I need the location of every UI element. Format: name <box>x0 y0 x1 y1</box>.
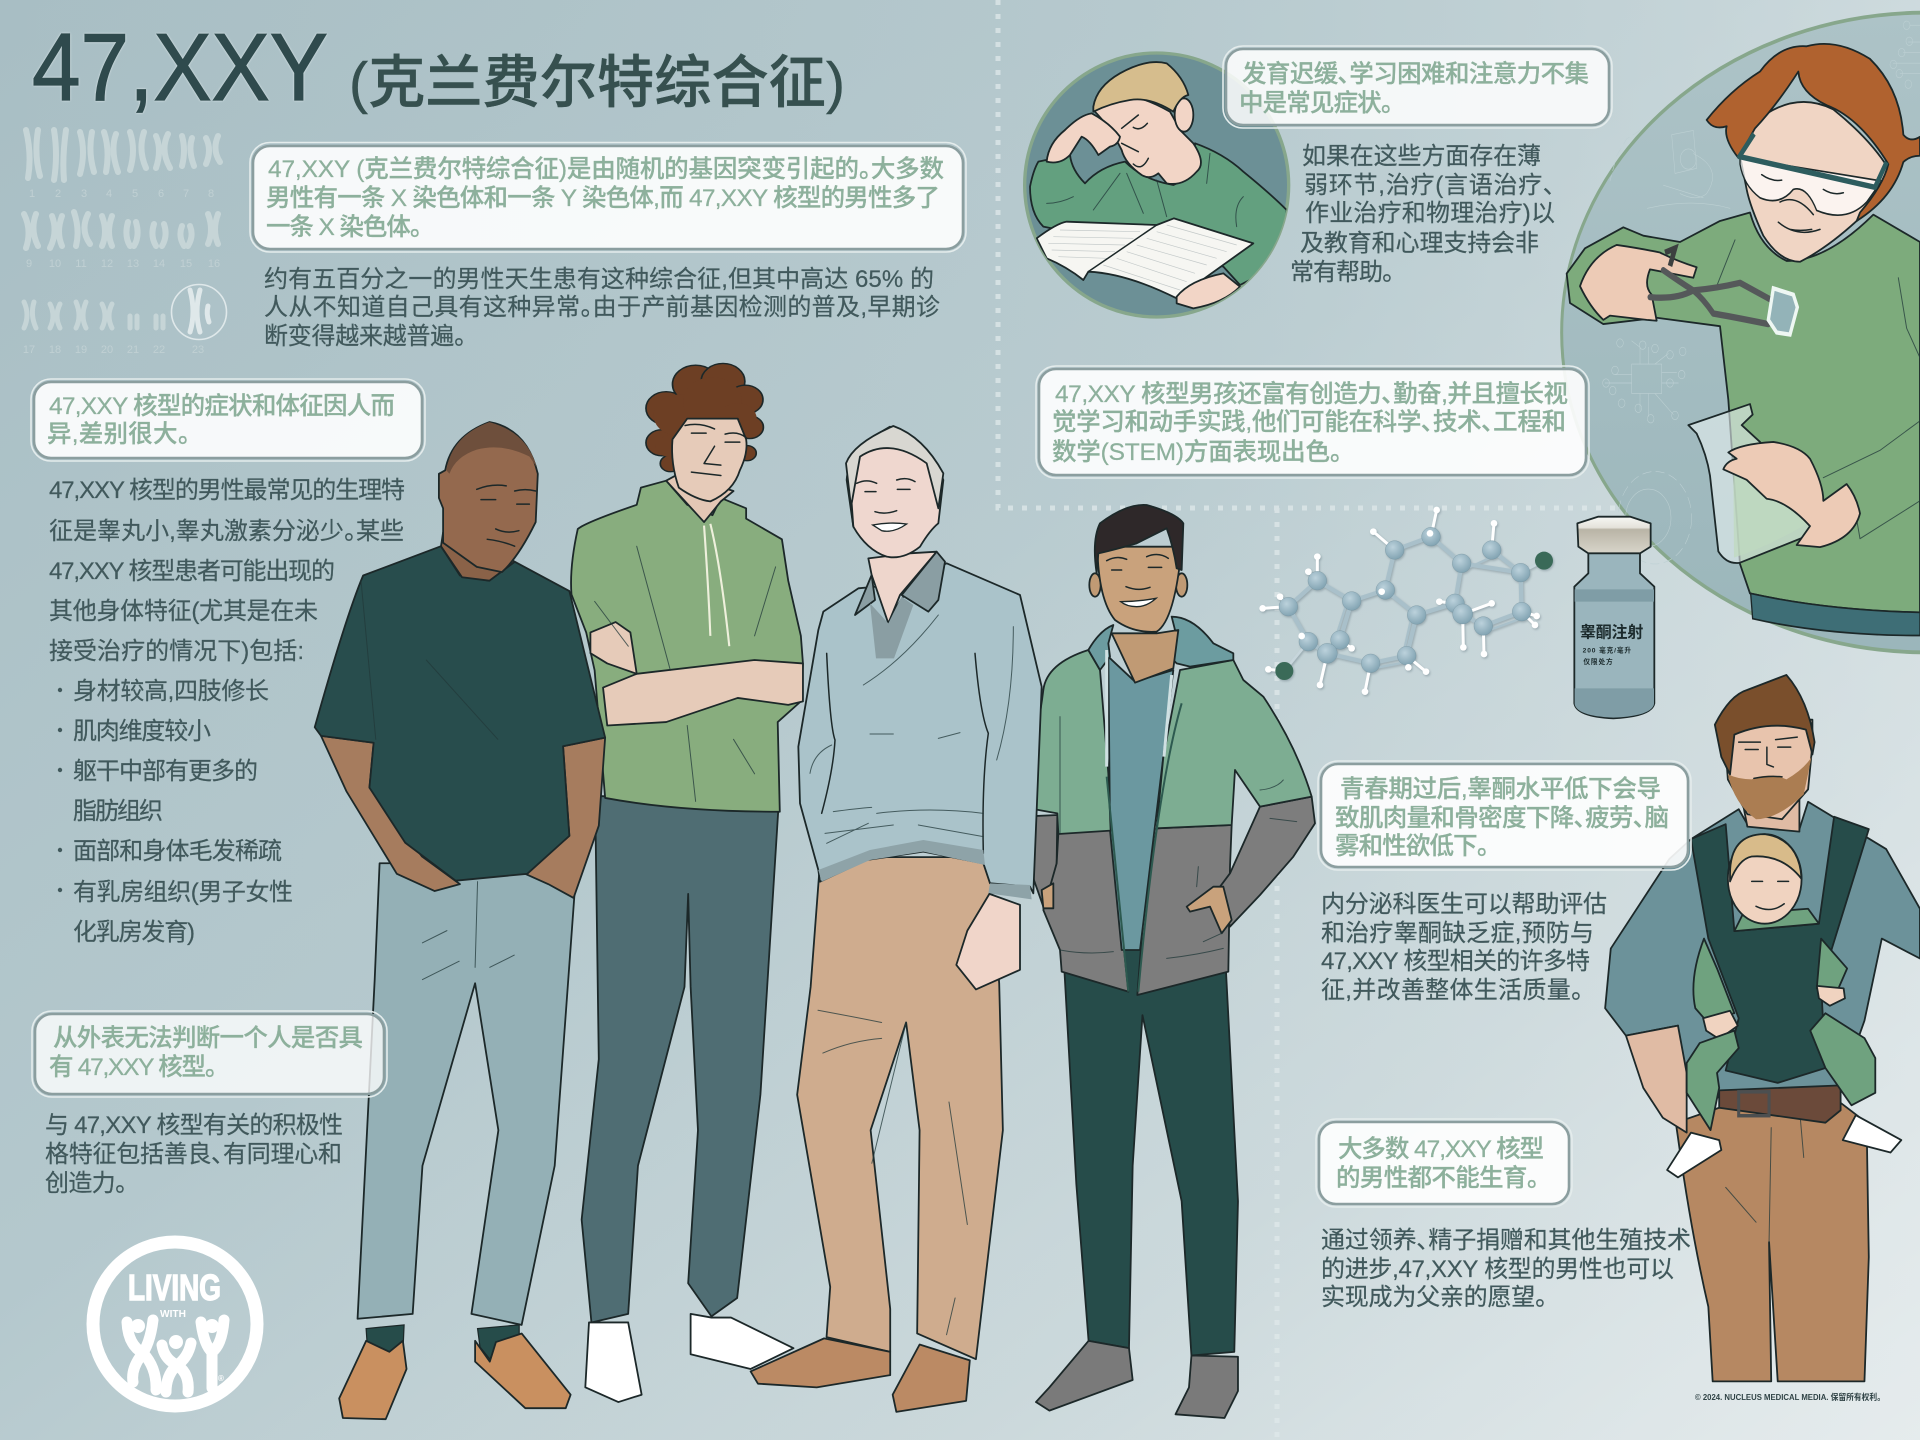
father trousers <box>1676 1103 1869 1381</box>
text block: endocrinologist: 和治疗睾酮缺乏症,预防与 <box>1321 920 1594 947</box>
text block: physical traits list: 面部和身体毛发稀疏 <box>73 838 282 865</box>
text block: prevalence: 人从不知道自己具有这种异常。由于产前基因检测的普及,早期诊 <box>264 294 940 321</box>
karyotype chromosome chart: 8 <box>208 188 214 200</box>
drawstrings <box>704 524 729 646</box>
baby face <box>1728 834 1802 924</box>
title: (克兰费尔特综合征) <box>349 51 845 115</box>
illustration: man in jacket upper body <box>1020 505 1315 995</box>
karyotype chromosome chart: 19 <box>75 344 87 356</box>
panel: STEM strengths <box>1036 366 1589 478</box>
molecule carbon atoms <box>1279 527 1531 673</box>
baby shoes <box>1667 1133 1721 1177</box>
panel: STEM strengths: 47,XXY 核型男孩还富有创造力、勤奋,并且擅长视 <box>1055 380 1568 408</box>
logo: Living with XXY: LIVING <box>128 1267 221 1308</box>
karyotype chromosome chart: 17 <box>23 344 35 356</box>
scientist sweater <box>1567 213 1920 612</box>
molecule bonds <box>1288 537 1522 663</box>
karyotype chromosome chart: 11 <box>75 258 87 270</box>
karyotype chromosome chart: 7 <box>183 188 189 200</box>
neck <box>868 552 937 623</box>
illustration: older man's hand <box>956 894 1020 989</box>
illustration: testosterone vial <box>1574 517 1654 718</box>
panel: developmental delays <box>1223 46 1612 128</box>
title <box>32 14 845 121</box>
karyotype chromosome chart: 1 <box>29 188 35 200</box>
hood right <box>1172 617 1233 667</box>
text block: endocrinologist: 内分泌科医生可以帮助评估 <box>1321 891 1607 918</box>
left sock <box>366 1325 404 1359</box>
jeans <box>358 863 577 1325</box>
boy hand on forehead <box>1047 113 1120 162</box>
karyotype chromosome chart: 16 <box>208 258 220 270</box>
scientist face <box>1740 102 1888 262</box>
text block: fatherhood: 的进步,47,XXY 核型的男性也可以 <box>1321 1256 1674 1283</box>
sweater ribbed hem <box>818 840 985 882</box>
rock sample <box>1768 288 1797 335</box>
vial label: 睾酮注射 <box>1580 623 1643 642</box>
upper hand <box>590 622 637 674</box>
curly hair outline <box>646 363 763 472</box>
karyotype chromosome chart: 13 <box>127 258 139 270</box>
text block: physical traits list: 躯干中部有更多的 <box>73 758 258 785</box>
shirt under jacket <box>1108 657 1173 950</box>
panel: low testosterone: 青春期过后,睾酮水平低下会导 <box>1340 775 1661 803</box>
text block: prevalence: 约有五百分之一的男性天生患有这种综合征,但其中高达 65% 的 <box>264 266 934 293</box>
jacket left green <box>1020 650 1111 834</box>
text block: prevalence: 断变得越来越普遍。 <box>264 323 466 350</box>
text block: endocrinologist: 47,XXY 核型相关的许多特 <box>1321 948 1590 975</box>
left arm <box>321 736 460 891</box>
illustration: hoodie man upper body <box>571 363 803 812</box>
neck <box>1112 630 1178 683</box>
older man trousers <box>797 857 1003 1359</box>
dotted divider lines <box>998 0 1620 1440</box>
father forearm <box>1626 1026 1687 1133</box>
panel: STEM strengths: 数学(STEM)方面表现出色。 <box>1052 438 1342 466</box>
text block: physical traits list: 身材较高,四肢修长 <box>73 678 269 705</box>
text block: endocrinologist: 征,并改善整体生活质量。 <box>1321 977 1583 1004</box>
karyotype chromosome chart: 3 <box>81 188 87 200</box>
panel: cannot tell from appearance: 有 47,XXY 核型。 <box>49 1053 217 1081</box>
jacket left sleeve grey <box>1020 815 1057 907</box>
icon: corner circuit <box>1890 21 1920 88</box>
father face <box>1724 720 1812 819</box>
illustration: father carrying baby <box>1605 675 1920 1381</box>
flask <box>1688 404 1811 563</box>
logo: Living with XXY <box>93 1242 257 1406</box>
icon: circuit chip <box>1603 339 1686 423</box>
panel: cause of 47,XXY <box>250 142 966 252</box>
panel: symptoms vary: 47,XXY 核型的症状和体征因人而 <box>49 392 395 420</box>
text block: physical traits list: 47,XXY 核型患者可能出现的 <box>49 558 335 585</box>
karyotype chromosome chart: 6 <box>158 188 164 200</box>
placket <box>870 597 913 658</box>
text block: physical traits list: 肌肉维度较小 <box>73 718 211 745</box>
sweater <box>798 563 1042 893</box>
text block: physical traits list: 其他身体特征(尤其是在未 <box>49 598 318 625</box>
baby legs <box>1687 1013 1875 1130</box>
baby arms <box>1693 939 1847 1018</box>
panel: cause of 47,XXY: 47,XXY (克兰费尔特综合征)是由随机的基因突变引起的。大多数 <box>268 155 944 183</box>
text block: positive traits: 与 47,XXY 核型有关的积极性 <box>45 1112 343 1139</box>
panel: low testosterone: 致肌肉量和骨密度下降、疲劳、脑 <box>1335 804 1669 832</box>
left hand <box>1042 883 1053 908</box>
logo: Living with XXY: WITH <box>160 1309 186 1320</box>
panel: fertility: 大多数 47,XXY 核型 <box>1338 1135 1544 1163</box>
scientist hair <box>1707 44 1920 221</box>
karyotype chromosome chart: 22 <box>153 344 165 356</box>
text block: fatherhood: 通过领养、精子捐赠和其他生殖技术 <box>1321 1227 1691 1254</box>
text block: physical traits list: 征是睾丸小,睾丸激素分泌少。某些 <box>49 518 404 545</box>
hair <box>846 426 943 527</box>
panel: developmental delays: 发育迟缓、学习困难和注意力不集 <box>1242 60 1589 88</box>
face <box>847 427 943 557</box>
illustration: boy reading circle <box>1025 53 1289 317</box>
father shirt <box>1605 802 1920 1098</box>
panel: symptoms vary: 异,差别很大。 <box>47 420 190 448</box>
panel: cannot tell from appearance: 从外表无法判断一个人是否具 <box>53 1024 363 1052</box>
copyright: © 2024. NUCLEUS MEDICAL MEDIA. 保留所有权利。 <box>1695 1392 1881 1402</box>
t-shirt <box>315 546 605 881</box>
text block: physical traits list: 有乳房组织(男子女性 <box>73 879 293 906</box>
molecule hydrogen atoms <box>1259 507 1540 695</box>
hoodie man trousers <box>582 796 779 1322</box>
panel: fertility: 的男性都不能生育。 <box>1336 1164 1539 1192</box>
text block: endocrinologist <box>1321 891 1607 1004</box>
panel: developmental delays: 中是常见症状。 <box>1239 89 1393 117</box>
boy head and neck <box>1093 95 1201 184</box>
left shoe <box>339 1341 407 1419</box>
cropped hair <box>446 422 537 474</box>
karyotype chromosome chart: 5 <box>132 188 138 200</box>
left hand and tongs <box>1580 245 1697 321</box>
father belt <box>1719 1085 1841 1123</box>
hoodie man left shoe <box>585 1322 642 1402</box>
karyotype chromosome chart: 23 <box>192 344 204 356</box>
father neck <box>1743 799 1799 832</box>
father beard <box>1728 757 1812 819</box>
right arm <box>525 738 605 898</box>
jacket man trousers <box>1063 943 1238 1356</box>
boy hand on book <box>1177 273 1240 308</box>
smile <box>873 523 907 531</box>
face <box>672 419 747 501</box>
ring <box>1665 248 1675 266</box>
hand holding flask <box>1723 442 1860 547</box>
text block: positive traits <box>45 1112 343 1197</box>
text block: therapy support: 常有帮助。 <box>1290 259 1394 286</box>
text block: positive traits: 创造力。 <box>45 1170 127 1197</box>
vial body <box>1574 552 1654 718</box>
illustration: scientist in lab circle <box>1562 13 1920 652</box>
karyotype chromosome chart: 12 <box>101 258 113 270</box>
karyotype chromosome chart: 21 <box>127 344 139 356</box>
goggles <box>1740 158 1882 215</box>
crossed forearm <box>603 660 803 726</box>
hoodie <box>571 481 803 812</box>
panel: fertility <box>1316 1119 1572 1207</box>
text block: physical traits list: 化乳房发育) <box>73 919 195 946</box>
open book <box>1037 218 1253 298</box>
legs and shoes of the four men <box>339 796 1238 1419</box>
head <box>439 422 538 572</box>
baby bib <box>1734 909 1819 931</box>
karyotype chromosome chart <box>23 130 226 356</box>
face <box>1097 547 1182 632</box>
panel: cause of 47,XXY: 一条 X 染色体。 <box>266 213 422 241</box>
hair <box>1095 505 1183 573</box>
baby hair <box>1730 834 1802 881</box>
text block: prevalence <box>264 266 940 350</box>
karyotype chromosome chart: 14 <box>153 258 165 270</box>
older man left shoe <box>751 1338 890 1387</box>
panel: symptoms vary <box>31 379 425 461</box>
panel: low testosterone <box>1318 761 1691 870</box>
karyotype chromosome chart: 15 <box>180 258 192 270</box>
right sock <box>478 1325 519 1359</box>
illustration: testosterone molecule <box>1259 507 1553 695</box>
vial cap <box>1577 517 1651 553</box>
illustration: t-shirt man upper body <box>315 422 605 898</box>
illustration: older man upper body <box>798 426 1042 899</box>
jacket man left shoe <box>1036 1341 1133 1411</box>
collar right <box>902 552 945 612</box>
text block: physical traits list: 47,XXY 核型的男性最常见的生理特 <box>49 477 405 504</box>
panel: cause of 47,XXY: 男性有一条 X 染色体和一条 Y 染色体,而 47,XXY 核型的男性多了 <box>266 184 940 212</box>
text block: therapy support: 作业治疗和物理治疗)以 <box>1305 200 1555 227</box>
molecule hydrogen sticks <box>1263 510 1537 692</box>
text block: physical traits list: 脂肪组织 <box>73 798 163 825</box>
karyotype chromosome chart: 20 <box>101 344 113 356</box>
tongs <box>1650 270 1771 324</box>
older man right shoe <box>893 1345 970 1412</box>
karyotype chromosome chart: 9 <box>26 258 32 270</box>
logo: Living with XXY: ® <box>218 1374 224 1383</box>
panel: cannot tell from appearance <box>32 1011 387 1097</box>
karyotype chromosome chart: 4 <box>106 188 112 200</box>
title: 47,XXY <box>32 14 328 121</box>
boy hair <box>1093 62 1188 112</box>
boy ear <box>1175 98 1193 132</box>
jacket right panel grey <box>1137 825 1232 995</box>
jacket right green <box>1157 660 1312 828</box>
karyotype chromosome chart: 2 <box>55 188 61 200</box>
text block: physical traits list <box>49 477 405 946</box>
flask liquid <box>1733 455 1807 558</box>
hair fill <box>654 377 757 457</box>
drawstrings <box>1107 650 1172 767</box>
text block: physical traits list: 接受治疗的情况下)包括: <box>49 638 304 665</box>
father hair <box>1715 675 1815 774</box>
illustration: testosterone vial: 200 毫克/毫升 <box>1583 645 1631 654</box>
text block: positive traits: 格特征包括善良、有同理心和 <box>45 1141 342 1168</box>
smile <box>1121 598 1156 607</box>
boy sweater <box>1030 143 1287 285</box>
right shoe <box>475 1333 571 1408</box>
hood left <box>1088 625 1113 670</box>
text block: fatherhood: 实现成为父亲的愿望。 <box>1321 1284 1547 1311</box>
molecule oxygen atoms <box>1284 561 1544 671</box>
jacket man right shoe <box>1176 1356 1238 1418</box>
text block: therapy support <box>1290 143 1555 286</box>
icon: microscope <box>1647 130 1730 208</box>
cuff <box>988 883 1032 899</box>
scientist shirt hem <box>1751 593 1920 636</box>
illustration: testosterone vial: 仅限处方 <box>1583 657 1613 666</box>
panel: low testosterone: 雾和性欲低下。 <box>1335 832 1489 860</box>
hoodie man right shoe <box>691 1314 793 1369</box>
right hand <box>1187 887 1232 933</box>
text block: therapy support: 如果在这些方面存在薄 <box>1302 143 1541 170</box>
icon: gear fragment <box>1610 130 1640 181</box>
karyotype chromosome chart: 10 <box>49 258 61 270</box>
neck <box>441 532 515 581</box>
karyotype chromosome chart: 18 <box>49 344 61 356</box>
panel: STEM strengths: 觉学习和动手实践,他们可能在科学、技术、工程和 <box>1052 408 1566 436</box>
zipper <box>1107 703 1182 992</box>
icon: gear <box>1618 471 1692 564</box>
jacket right sleeve grey <box>1220 797 1315 927</box>
collar left <box>855 575 875 615</box>
text block: therapy support: 及教育和心理支持会非 <box>1300 230 1539 257</box>
baby carrier <box>1691 817 1869 1083</box>
jacket left panel grey <box>1043 830 1128 992</box>
text block: fatherhood <box>1321 1227 1691 1311</box>
neck <box>666 474 734 522</box>
ears <box>1089 573 1101 597</box>
text block: therapy support: 弱环节,治疗(言语治疗、 <box>1304 172 1555 199</box>
